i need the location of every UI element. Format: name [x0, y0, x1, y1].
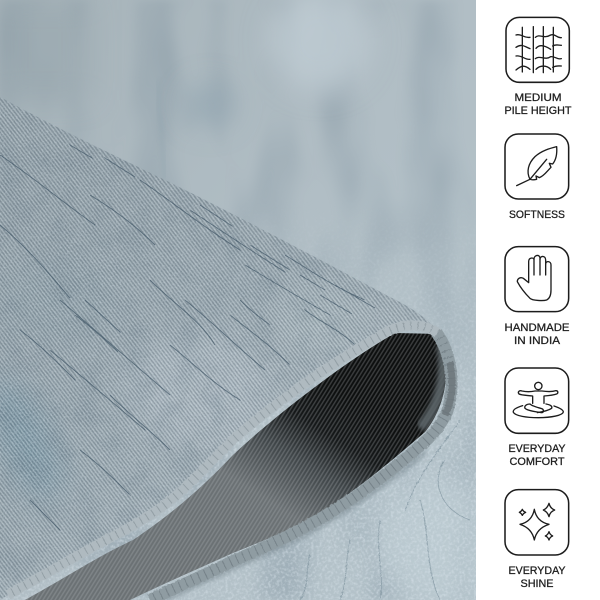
rug top flap — [0, 98, 441, 600]
icon: sparkles — [505, 490, 569, 555]
icon: feather — [505, 134, 569, 199]
panel: feature icons — [504, 17, 572, 590]
feature: medium pile height: PILE HEIGHT — [504, 105, 572, 117]
feature: handmade in india — [504, 247, 570, 347]
feature: handmade in india: IN INDIA — [514, 335, 561, 347]
feature: everyday shine: SHINE — [520, 578, 554, 590]
label: everyday shine: EVERYDAY — [508, 565, 566, 577]
feature: medium pile height — [504, 17, 572, 117]
feature: everyday comfort: COMFORT — [510, 456, 565, 468]
icon: meditating figure — [505, 368, 569, 433]
icon: pile weave — [506, 17, 569, 82]
rug folded edge binding, lower roll — [150, 332, 452, 600]
icon: hand — [505, 247, 569, 312]
label: softness: SOFTNESS — [509, 209, 565, 221]
feature: softness — [505, 134, 569, 221]
flap edge binding — [8, 325, 438, 595]
label: everyday comfort: EVERYDAY — [508, 443, 566, 455]
feature: everyday comfort — [505, 368, 569, 468]
label: handmade in india: HANDMADE — [504, 322, 570, 334]
rug surface creases — [0, 145, 375, 530]
label: medium pile height: MEDIUM — [514, 92, 562, 104]
feature: everyday shine — [505, 490, 569, 590]
rug underside: dark ribbed backing — [25, 333, 446, 600]
